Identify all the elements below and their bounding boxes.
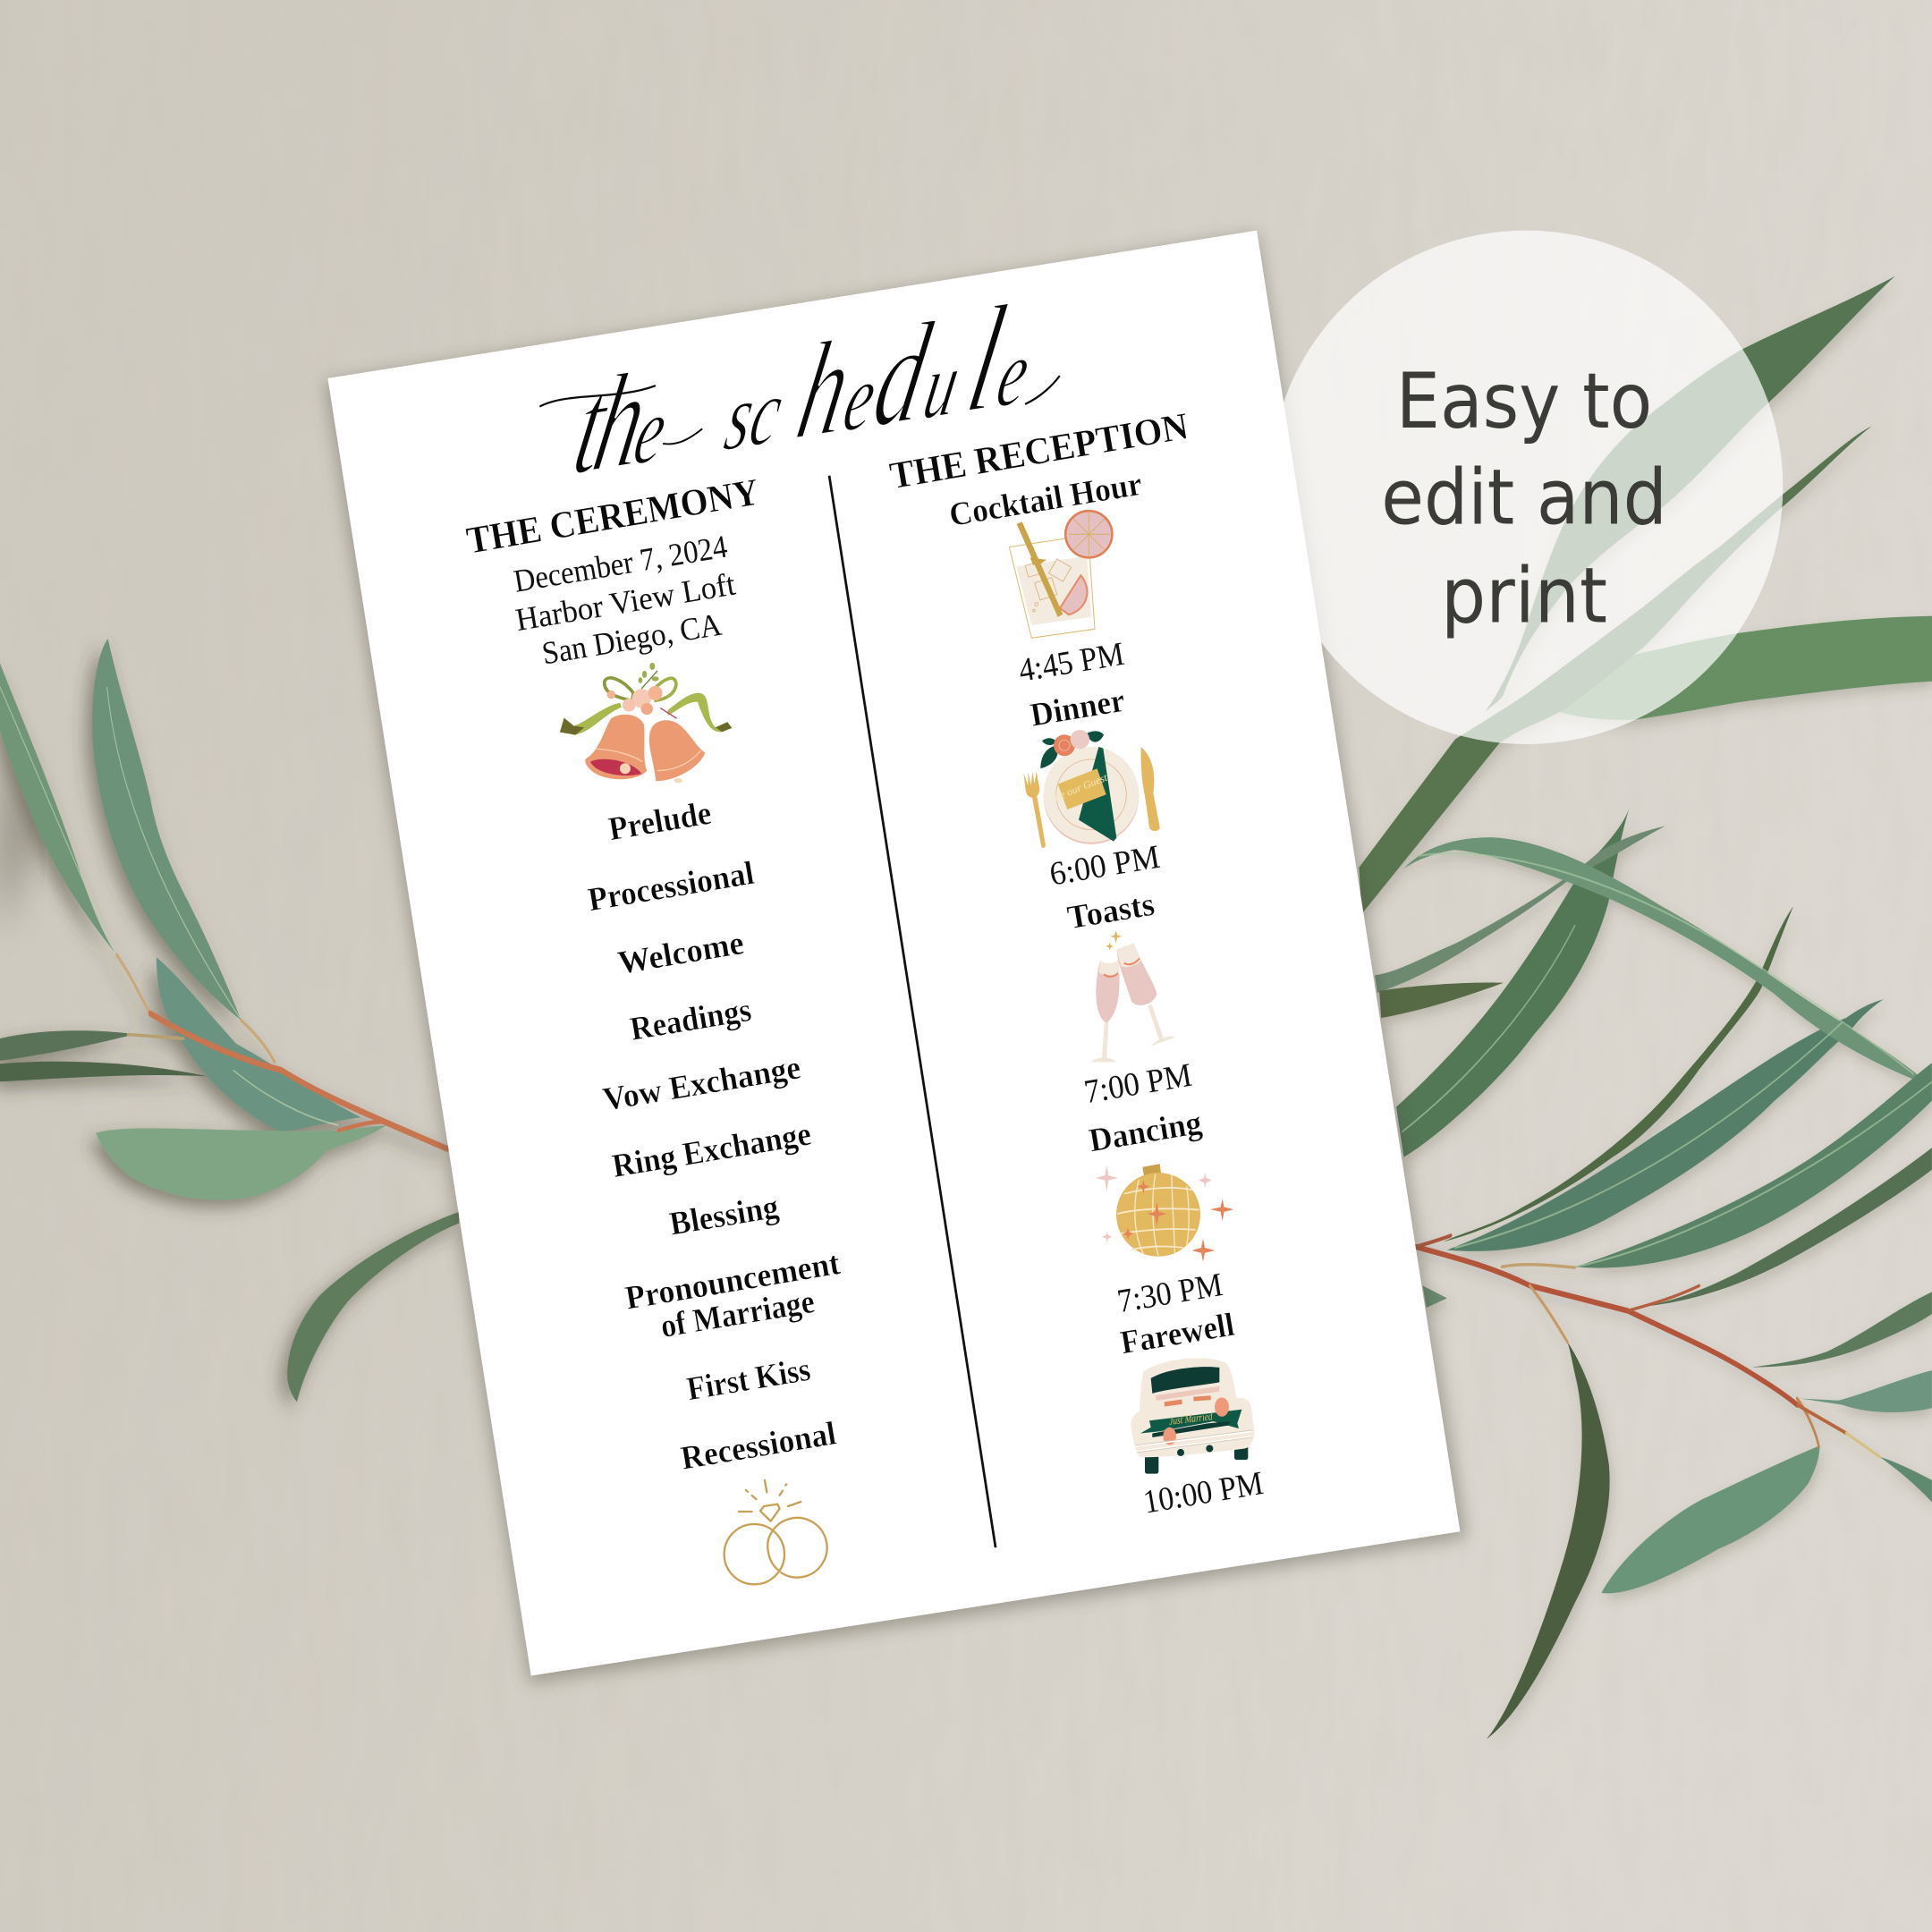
reception item: toasts: 7:00 PM xyxy=(1081,1057,1195,1111)
icon: place setting xyxy=(1023,730,1160,848)
reception item: dancing: 7:30 PM xyxy=(1114,1267,1225,1320)
leaves behind the callout circle xyxy=(1359,276,1932,914)
icon: wedding rings xyxy=(724,1480,827,1584)
reception heading: THE RECEPTION xyxy=(886,405,1191,497)
title: l xyxy=(956,273,1017,445)
ceremony program list: First Kiss xyxy=(684,1352,813,1408)
title xyxy=(539,268,1060,507)
icon: place setting: Be our Guest xyxy=(1052,771,1109,804)
reception item: cocktail hour: Cocktail Hour xyxy=(946,466,1145,534)
reception item: farewell xyxy=(1118,1307,1266,1521)
title: h xyxy=(583,341,659,502)
reception item: cocktail hour xyxy=(946,466,1145,690)
reception item: dinner xyxy=(1023,682,1163,894)
ceremony details xyxy=(511,528,738,672)
icon: getaway car: Just Married xyxy=(1169,1411,1213,1428)
callout text: Easy to xyxy=(1396,358,1652,446)
reception item: toasts: Toasts xyxy=(1064,886,1157,936)
title: s xyxy=(717,361,763,471)
reception item: farewell: 10:00 PM xyxy=(1140,1465,1266,1521)
ceremony program list: Vow Exchange xyxy=(600,1049,803,1119)
reception item: cocktail hour: 4:45 PM xyxy=(1016,636,1127,690)
ceremony heading: THE CEREMONY xyxy=(463,471,762,563)
reception item: toasts xyxy=(1064,886,1195,1111)
ceremony program list: of Marriage xyxy=(658,1284,818,1345)
ceremony program list: Recessional xyxy=(678,1415,839,1478)
ceremony program list: Prelude xyxy=(606,795,714,848)
ceremony details: December 7, 2024 xyxy=(511,528,730,599)
title: h xyxy=(786,309,862,469)
ceremony program list: Readings xyxy=(628,992,754,1048)
icon: getaway car xyxy=(1131,1358,1254,1474)
ceremony program list: Blessing xyxy=(667,1189,782,1243)
reception item: dancing xyxy=(1087,1105,1233,1320)
title: e xyxy=(989,318,1038,428)
icon: wedding bells xyxy=(560,663,732,783)
reception item: dancing: Dancing xyxy=(1087,1105,1205,1159)
ceremony program list xyxy=(585,795,843,1478)
divider xyxy=(829,476,996,1547)
reception item: dinner: 6:00 PM xyxy=(1047,839,1163,894)
title: c xyxy=(742,357,791,467)
callout text: edit and xyxy=(1381,453,1667,542)
card shadow xyxy=(326,234,1466,1683)
title: e xyxy=(836,342,885,453)
schedule card xyxy=(327,231,1460,1675)
icon: cocktail xyxy=(1009,511,1112,638)
title: u xyxy=(916,329,969,439)
reception item: farewell: Farewell xyxy=(1118,1307,1237,1361)
reception item: dinner: Dinner xyxy=(1028,682,1128,734)
callout text: print xyxy=(1441,553,1607,641)
ceremony program list: Welcome xyxy=(615,925,747,982)
ceremony program list: Ring Exchange xyxy=(610,1116,814,1185)
left eucalyptus branch xyxy=(0,639,459,1402)
ceremony program list: Processional xyxy=(585,855,757,919)
title: t xyxy=(564,346,621,504)
title: e xyxy=(626,375,675,486)
callout text xyxy=(1381,358,1667,641)
ceremony program list: Pronouncement xyxy=(623,1245,843,1318)
ceremony details: San Diego, CA xyxy=(539,606,724,672)
callout circle xyxy=(1269,231,1783,744)
right eucalyptus branch xyxy=(1375,807,1932,1739)
title: d xyxy=(863,292,942,459)
icon: disco ball xyxy=(1096,1164,1233,1262)
ceremony details: Harbor View Loft xyxy=(513,566,738,638)
icon: champagne flutes xyxy=(1090,930,1175,1062)
